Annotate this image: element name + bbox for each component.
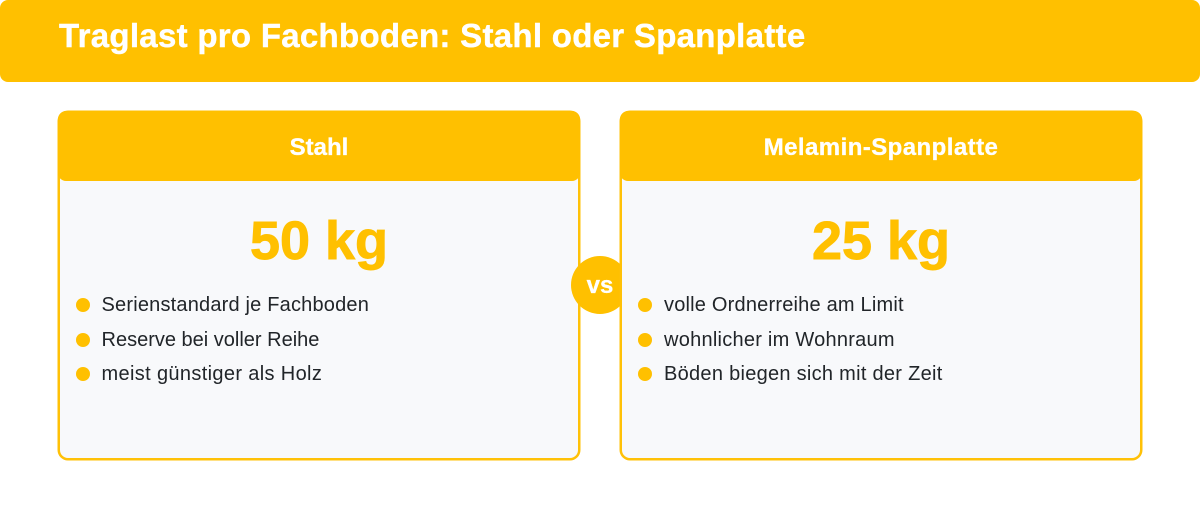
- list item: Serienstandard: Serienstandard je Fachboden: [102, 294, 369, 316]
- panel: Stahl: [58, 111, 580, 460]
- value: 50 kg: 50 kg: [250, 211, 388, 271]
- list item: Ordnerreihe: volle Ordnerreihe am Limit: [664, 294, 904, 316]
- list item: Reserve: Reserve bei voller Reihe: [102, 329, 319, 351]
- panel heading: Melamin-Spanplatte: [620, 111, 1142, 181]
- title banner: [0, 0, 1200, 82]
- panel heading: Stahl: [58, 111, 580, 181]
- panel heading: Stahl: Stahl: [290, 134, 348, 161]
- panel: Melamin-Spanplatte: [620, 111, 1142, 460]
- list item: Böden: Böden biegen sich mit der Zeit: [664, 363, 943, 385]
- list item: wohnlicher: wohnlicher im Wohnraum: [664, 329, 895, 351]
- list item: günstiger: meist günstiger als Holz: [102, 363, 322, 385]
- panel heading: Melamin-Spanplatte: Melamin-Spanplatte: [764, 134, 998, 161]
- vs badge: vs: [587, 272, 613, 299]
- title: Traglast pro Fachboden: Stahl oder Spanplatte: [59, 17, 805, 54]
- vs badge: [571, 256, 629, 314]
- value: 25 kg: 25 kg: [812, 211, 950, 271]
